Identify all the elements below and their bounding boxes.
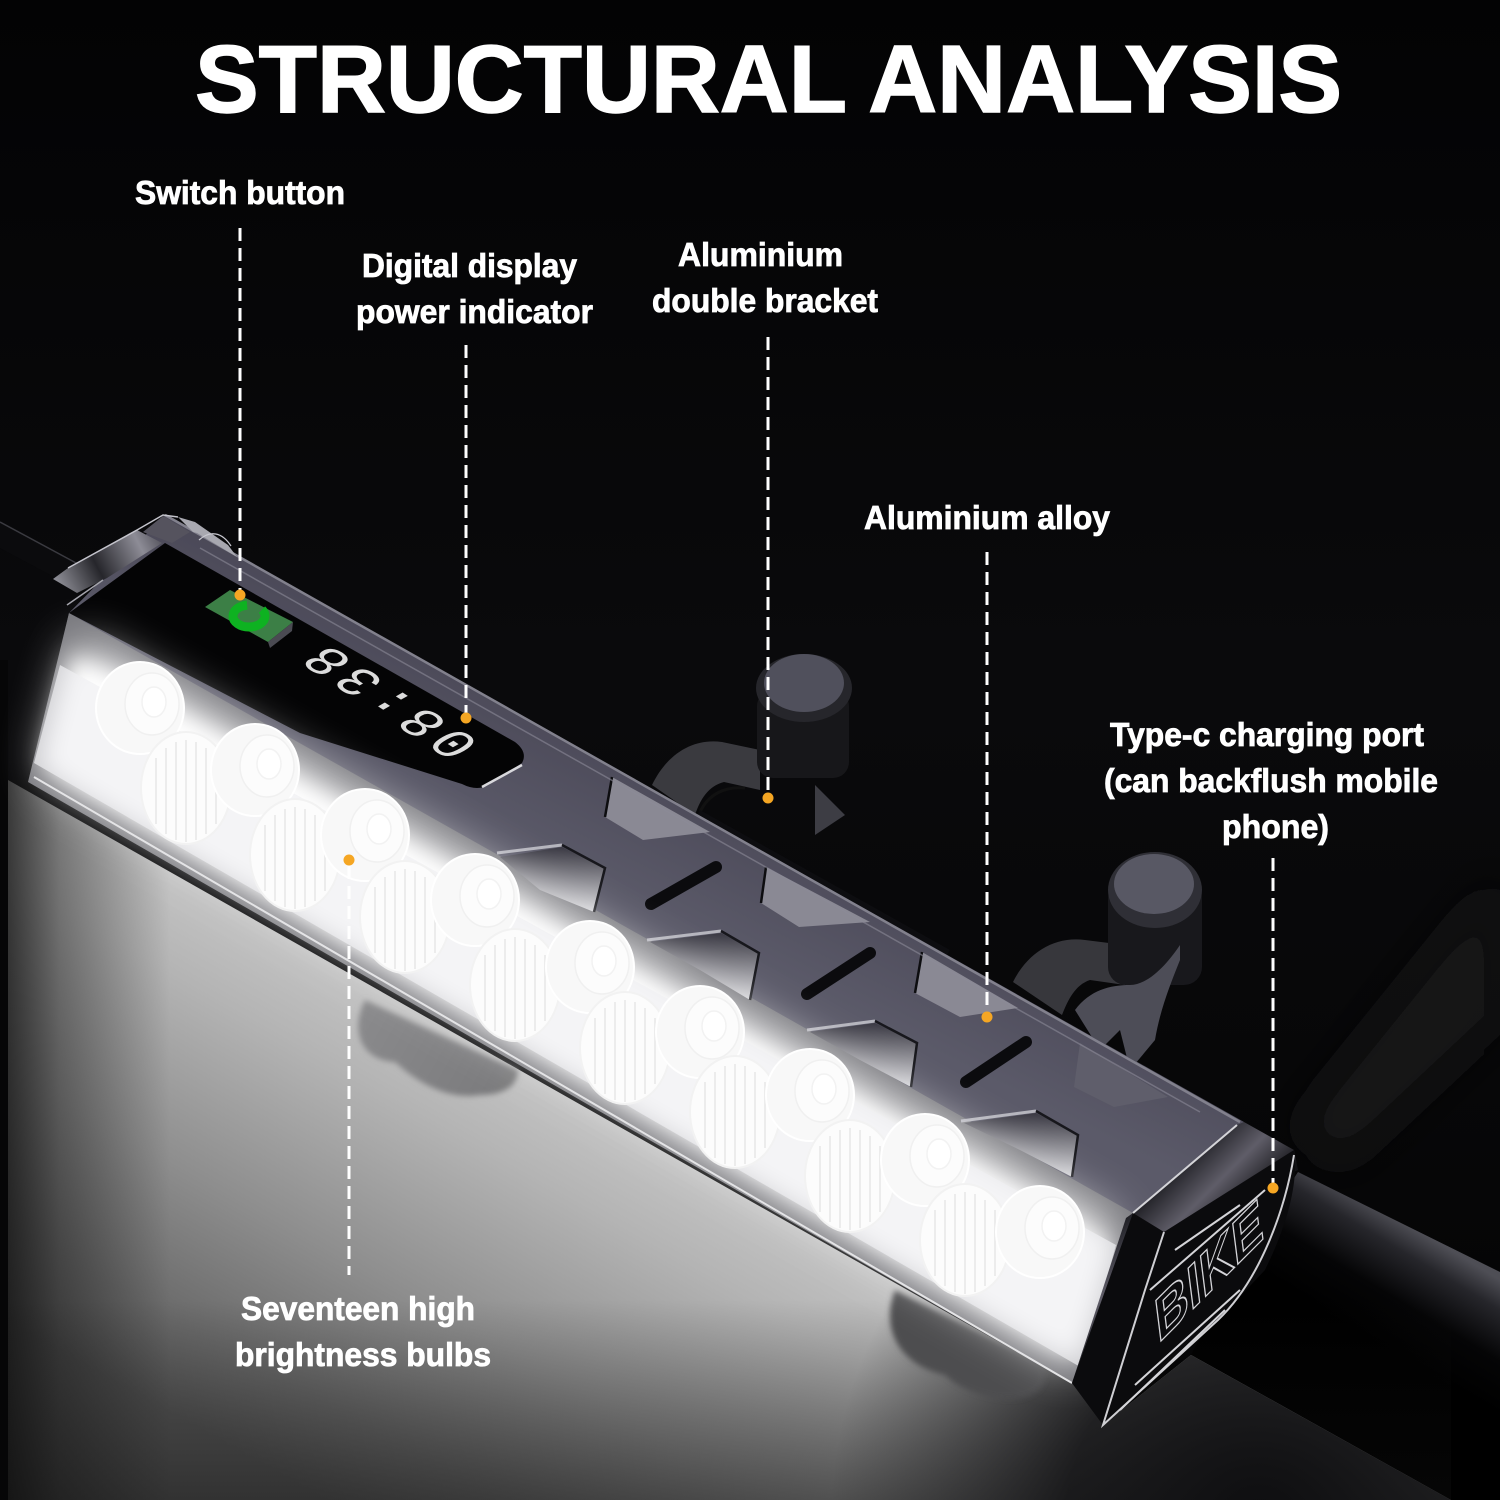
lower bracket left [358, 1000, 518, 1096]
label: type-c charging port: phone) [1222, 808, 1329, 845]
bracket: rear left [652, 654, 950, 1000]
handlebar [0, 522, 1500, 1500]
digital display: 08:38 [286, 633, 497, 765]
label: seventeen high brightness bulbs [235, 854, 491, 1373]
label: aluminium double bracket: double bracket [652, 282, 878, 319]
lens housing [28, 613, 1133, 1388]
title: STRUCTURAL ANALYSIS [195, 26, 1342, 133]
lens panel [34, 665, 1116, 1368]
end cap [1072, 1122, 1298, 1425]
label: aluminium alloy: Aluminium alloy [864, 499, 1111, 536]
label: digital display power indicator: power indicator [356, 293, 593, 330]
label: aluminium alloy [864, 499, 1111, 1022]
light beam [0, 660, 1500, 1500]
label: digital display power indicator: Digital display [362, 247, 578, 284]
lower zigzag notches [500, 847, 1078, 1177]
label: seventeen high brightness bulbs: brightness bulbs [235, 1336, 491, 1373]
label: aluminium double bracket [652, 236, 878, 804]
label: type-c charging port: (can backflush mobile [1104, 762, 1438, 799]
label: switch button [135, 174, 345, 600]
upper zigzag plates [605, 777, 1168, 1107]
body top face [32, 515, 1244, 1383]
upper plate shadows [605, 777, 922, 993]
upper edge highlight [165, 515, 1240, 1122]
label: type-c charging port: Type-c charging port [1110, 716, 1424, 753]
notch rims [497, 845, 1036, 1121]
label: aluminium double bracket: Aluminium [678, 236, 843, 273]
lens lower edge [34, 777, 1072, 1383]
label: switch button: Switch button [135, 174, 345, 211]
lower bracket right [890, 1290, 1045, 1399]
seventeen bulbs [96, 662, 1084, 1296]
label: seventeen high brightness bulbs: Seventeen high [241, 1290, 475, 1327]
label: digital display power indicator [356, 247, 593, 724]
light body [28, 515, 1244, 1388]
background haze [1290, 870, 1500, 1170]
display panel [69, 543, 524, 788]
vent slots [651, 867, 1026, 1082]
label: type-c charging port [1104, 716, 1438, 1194]
bracket: rear right [1013, 852, 1202, 1070]
light glow [45, 640, 1115, 1365]
left clamp [53, 515, 237, 605]
display highlight [482, 765, 522, 787]
switch button [205, 590, 293, 648]
end cap logo: BIKE [1151, 1185, 1266, 1356]
